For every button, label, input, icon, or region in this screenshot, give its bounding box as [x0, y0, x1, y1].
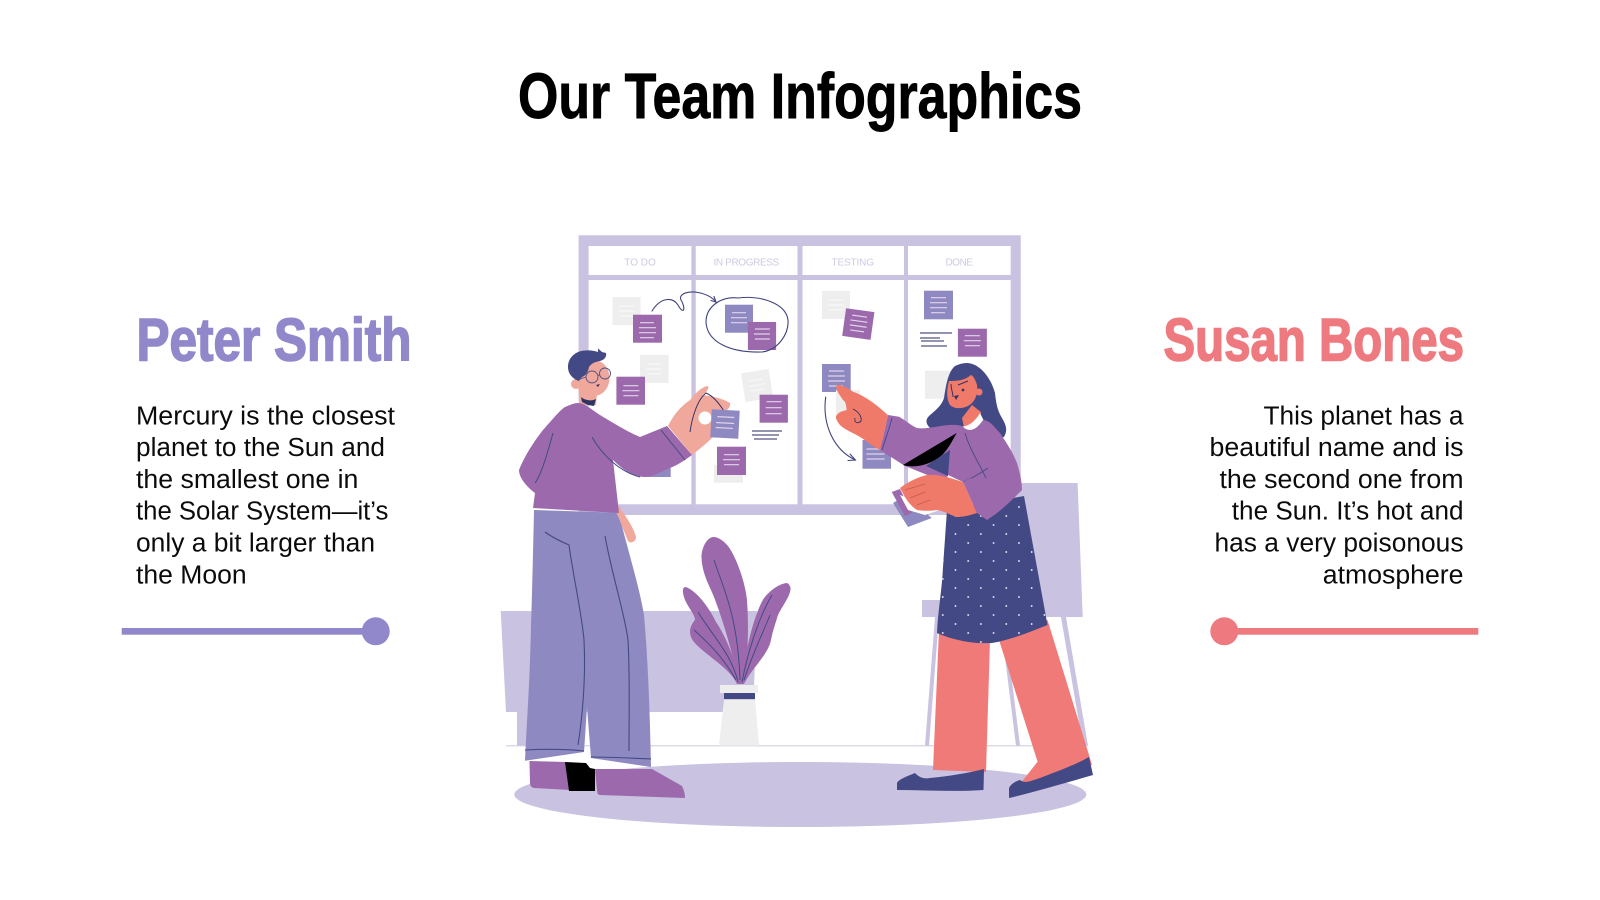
text block: Susan description	[1210, 402, 1464, 589]
column labels: IN PROGRESS	[714, 257, 780, 268]
legs	[933, 630, 990, 772]
panel: Peter Smith	[122, 307, 411, 645]
table at left	[501, 611, 757, 746]
lower hand	[900, 475, 977, 517]
sweater	[880, 415, 1022, 520]
connector: Susan line and dot	[1210, 617, 1478, 645]
column labels: TO DO	[624, 257, 656, 268]
chair at right	[922, 483, 1088, 746]
text block: Peter description: the smallest one in	[136, 466, 358, 494]
heading: Peter Smith: Peter Smith	[136, 307, 412, 374]
character: Peter	[519, 348, 740, 798]
text block: Peter description: the Solar System—it’s	[136, 498, 388, 526]
hair	[926, 363, 1006, 480]
column labels: TESTING	[832, 257, 874, 268]
dress	[937, 496, 1048, 643]
collar	[962, 413, 984, 432]
black shadow	[903, 433, 957, 466]
head	[568, 348, 610, 406]
kanban board	[579, 235, 1021, 515]
text block: Peter description	[136, 402, 395, 589]
floor line	[506, 745, 1087, 746]
held sticky	[710, 409, 740, 439]
text block: Susan description: the Sun. It’s hot and	[1232, 498, 1464, 526]
hand	[668, 386, 730, 455]
trousers	[525, 510, 651, 767]
panel: Susan Bones	[1164, 307, 1478, 645]
vase	[719, 685, 759, 746]
character: Susan	[836, 363, 1093, 798]
arm down	[616, 505, 636, 542]
tablet	[892, 489, 940, 527]
shoes	[530, 761, 685, 798]
text block: Peter description: only a bit larger than	[136, 530, 375, 558]
column labels: DONE	[946, 257, 973, 268]
heading: Susan Bones: Susan Bones	[1164, 307, 1464, 374]
pointing hand	[836, 385, 888, 450]
shoes	[897, 757, 1093, 798]
text block: Peter description: the Moon	[136, 561, 247, 589]
floor shadow	[514, 762, 1086, 827]
face	[947, 375, 984, 432]
text block: Susan description: has a very poisonous	[1214, 530, 1464, 558]
sweater	[519, 403, 692, 513]
sticky notes	[612, 291, 987, 483]
illustration: team at kanban board	[501, 235, 1093, 827]
text block: Susan description: the second one from	[1220, 466, 1464, 494]
text block: Susan description: beautiful name and is	[1210, 434, 1464, 462]
plant	[683, 537, 791, 746]
title: Our Team Infographics	[518, 60, 1082, 132]
text block: Susan description: atmosphere	[1323, 561, 1464, 589]
text block: Peter description: Mercury is the closest	[136, 402, 395, 430]
column labels	[624, 257, 973, 268]
arrows and circle	[652, 292, 855, 460]
text block: Peter description: planet to the Sun and	[136, 434, 385, 462]
connector: Peter line and dot	[122, 617, 390, 645]
cuff	[963, 478, 990, 520]
text block: Susan description: This planet has a	[1264, 402, 1464, 430]
